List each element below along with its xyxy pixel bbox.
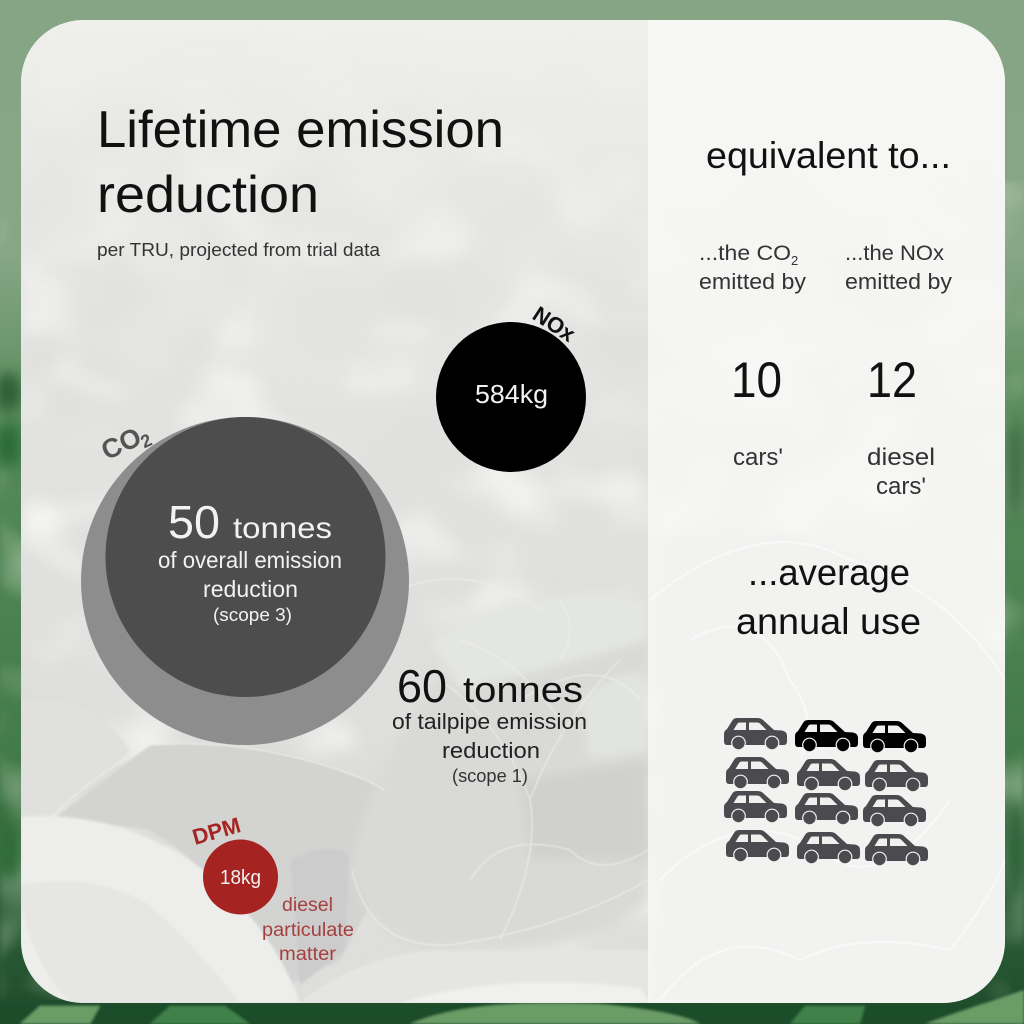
NOx equivalence column: ...the NOx (845, 242, 945, 265)
average annual use heading: annual use (736, 601, 921, 642)
soft blurred lettuce texture (22, 243, 648, 948)
DPM description: diesel (282, 895, 333, 916)
DPM description: matter (279, 944, 337, 965)
overall emission text: of overall emission (158, 547, 342, 573)
tailpipe emission text: 60 (397, 660, 447, 712)
NOx label: NOx (528, 301, 580, 347)
CO2 equivalence column: emitted by (699, 269, 806, 294)
CO2 equivalence column: 2 (791, 253, 798, 268)
CO2 equivalence column (699, 242, 806, 471)
NOx equivalence column: cars' (876, 473, 926, 500)
DPM label: DPM (189, 812, 243, 850)
overall emission text: (scope 3) (213, 605, 292, 625)
NOx equivalence column (845, 242, 952, 500)
overall emission text: tonnes (233, 512, 332, 545)
panel: lower leaf shapes (21, 741, 648, 1003)
CO2 equivalence column: 10 (731, 352, 782, 408)
right heading: equivalent to: equivalent to... (706, 135, 951, 176)
tailpipe emission text (392, 660, 587, 786)
tailpipe emission text: of tailpipe emission (392, 709, 587, 734)
title: Lifetime emission (97, 101, 504, 159)
NOx equivalence column: emitted by (845, 269, 952, 294)
average annual use heading: ...average (748, 552, 910, 593)
CO2 equivalence column: ...the CO (699, 242, 791, 265)
icon: car grid (724, 718, 928, 866)
NOx value: 584kg (475, 379, 548, 409)
NOx equivalence column: diesel (867, 444, 935, 471)
overall emission text: reduction (203, 576, 298, 602)
tailpipe emission text: (scope 1) (452, 766, 528, 786)
tailpipe emission text: reduction (442, 738, 540, 763)
CO2 label: CO (97, 422, 146, 466)
panel: right lighter panel (648, 20, 1005, 1003)
title (97, 101, 504, 224)
tailpipe circle (81, 417, 409, 745)
average annual use heading (736, 552, 921, 642)
title: reduction (97, 166, 319, 224)
overall emission circle (106, 417, 386, 697)
subtitle: per TRU, projected from trial data (97, 240, 381, 260)
overall emission text: 50 (168, 496, 220, 548)
CO2 equivalence column: cars' (733, 444, 783, 471)
NOx bubble (436, 301, 586, 472)
DPM bubble (189, 812, 278, 914)
DPM description (262, 895, 354, 965)
overall emission text (158, 496, 342, 625)
CO2 label: 2 (137, 430, 155, 452)
CO2 bubble chart (81, 417, 409, 745)
leaf veins (50, 579, 648, 945)
panel: central lettuce head (391, 621, 1005, 1003)
DPM description: particulate (262, 920, 354, 941)
tailpipe emission text: tonnes (463, 669, 583, 710)
NOx equivalence column: 12 (867, 352, 917, 408)
leaf outlines on right panel (650, 542, 1005, 1000)
DPM value: 18kg (220, 867, 261, 889)
